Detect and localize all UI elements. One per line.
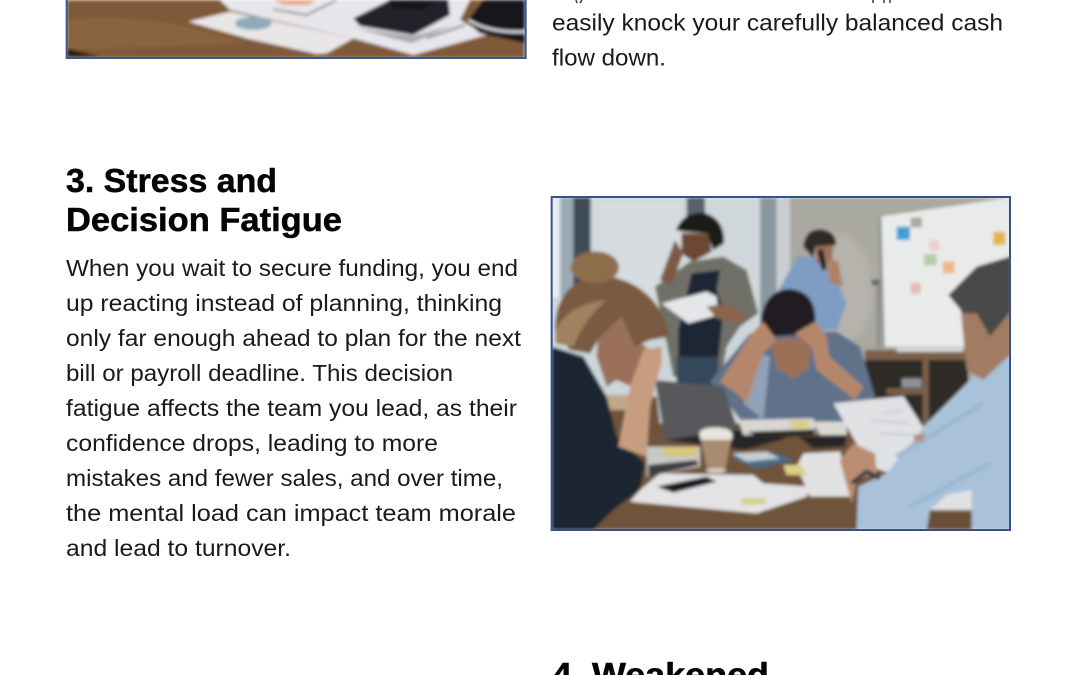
text block: end of section 2: easily knock your carefully balanced cash [552, 10, 1003, 36]
text block: section 3 body: bill or payroll deadline. This decision [66, 360, 453, 386]
office background [552, 197, 1012, 431]
photo frame [67, 0, 526, 58]
standing woman [655, 213, 758, 387]
text block: section 3 body: and lead to turnover. [66, 535, 291, 561]
text block: end of section 2 [552, 0, 1003, 70]
papers on desk [630, 418, 853, 513]
heading: 3. Stress and Decision Fatigue [66, 162, 342, 238]
whiteboard [872, 197, 1012, 348]
text block: section 3 body [66, 255, 522, 561]
text block: section 3 body: confidence drops, leading to more [66, 430, 438, 456]
text block: section 3 body: up reacting instead of planning, thinking [66, 290, 502, 316]
text block: end of section 2: flow down. [552, 44, 666, 70]
heading: 3. Stress and Decision Fatigue: 3. Stress and [66, 162, 277, 199]
centre man [710, 289, 875, 423]
text block: section 3 body: mistakes and fewer sales, and over time, [66, 465, 503, 491]
heading: 3. Stress and Decision Fatigue: Decision Fatigue [66, 201, 342, 238]
text block: section 3 body: fatigue affects the team you lead, as their [66, 395, 517, 421]
shelf [865, 347, 968, 427]
text block: section 3 body: the mental load can impact team morale [66, 500, 516, 526]
photo: stressed team around a cluttered table [552, 197, 1012, 530]
coffee cup [699, 427, 733, 473]
laptop [655, 380, 787, 450]
man with document [833, 256, 1012, 530]
man on phone [777, 229, 847, 330]
text block: section 3 body: only far enough ahead to plan for the next [66, 325, 522, 351]
woman with bun [552, 251, 669, 530]
photo: desk with papers and calculator [67, 0, 526, 58]
photo frame [552, 197, 1010, 530]
desk [592, 394, 888, 529]
text block: section 3 body: When you wait to secure funding, you end [66, 255, 518, 281]
